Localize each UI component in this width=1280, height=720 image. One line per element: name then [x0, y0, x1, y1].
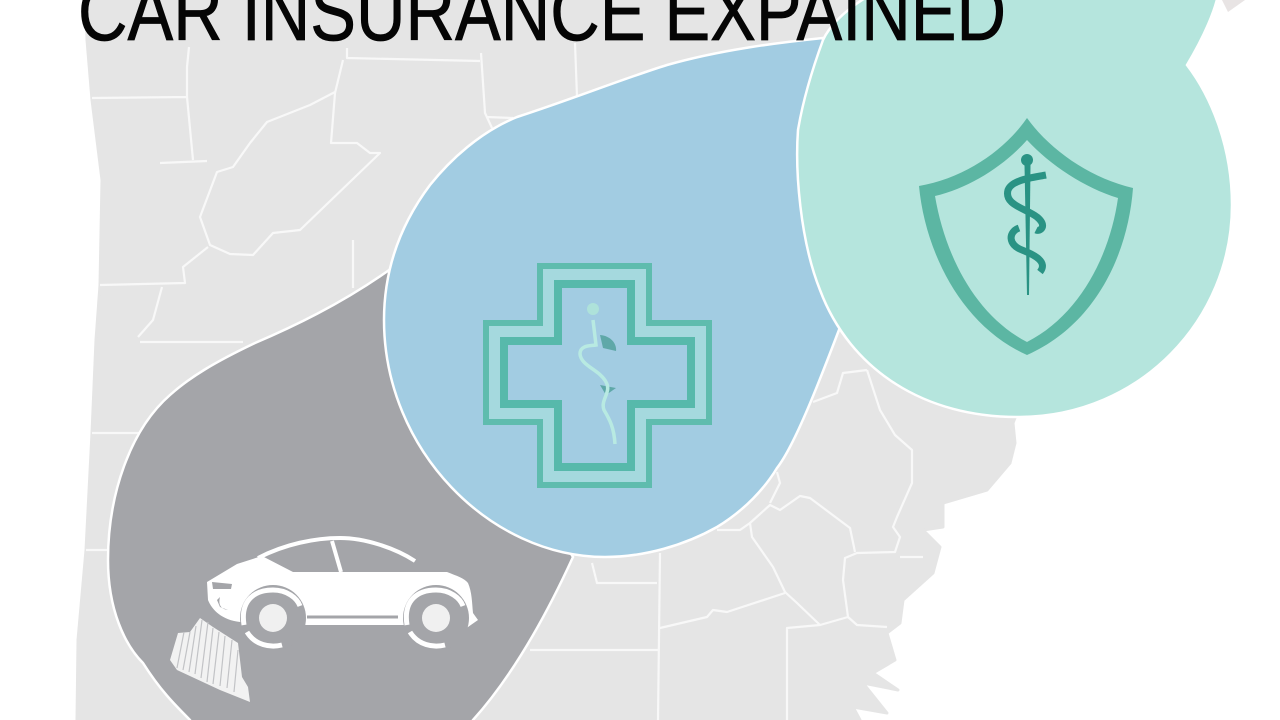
icon: shield with staff	[919, 118, 1133, 355]
teal circle: health protection	[797, 0, 1232, 417]
grey drop: car coverage	[108, 268, 573, 720]
icon: serpent staff	[580, 303, 616, 444]
icon: medical cross	[483, 263, 712, 488]
blue drop: medical coverage	[384, 38, 842, 557]
icon: car	[207, 538, 478, 651]
icon: skid marks	[170, 618, 250, 702]
